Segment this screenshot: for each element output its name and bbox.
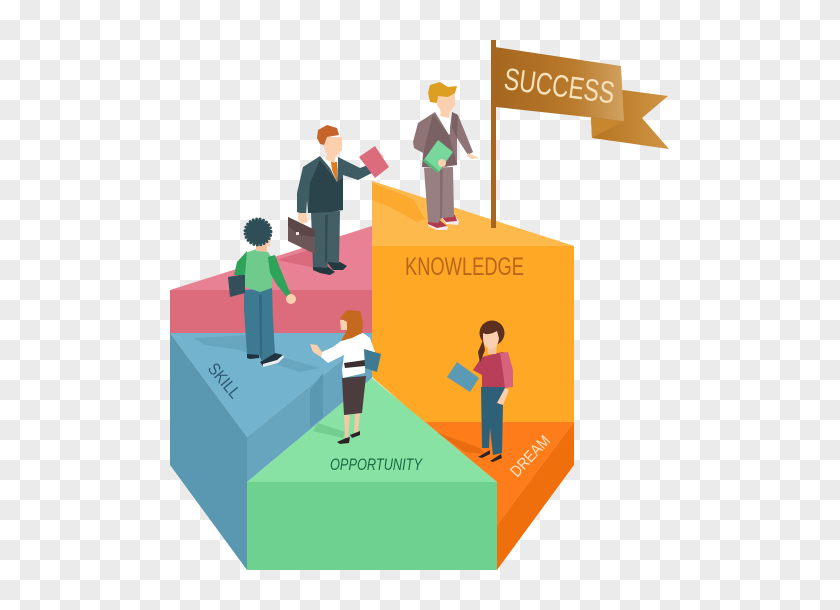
flag pole: [491, 40, 496, 228]
person: boy in green: [228, 219, 296, 367]
flag label: SUCCESS: [502, 61, 617, 110]
person: woman with folder: [447, 320, 513, 462]
label: skill: SKILL: [204, 359, 244, 402]
label: knowledge: KNOWLEDGE: [405, 253, 524, 281]
panel: skill block: [170, 333, 372, 570]
person: man in grey suit: [413, 82, 479, 230]
flag fold: [591, 118, 624, 138]
panel: opportunity block: [247, 378, 497, 570]
panel: pink block: [170, 226, 372, 334]
flag banner: [495, 47, 624, 121]
flag: success: [491, 40, 669, 228]
panel: dream block: [425, 422, 574, 570]
flag tail: [591, 90, 669, 149]
person: man with briefcase: [288, 125, 389, 275]
label: opportunity: OPPORTUNITY: [330, 455, 423, 474]
panel: knowledge block: [372, 181, 574, 423]
person: woman in white blouse: [310, 310, 381, 444]
label: dream: DREAM: [507, 433, 554, 481]
